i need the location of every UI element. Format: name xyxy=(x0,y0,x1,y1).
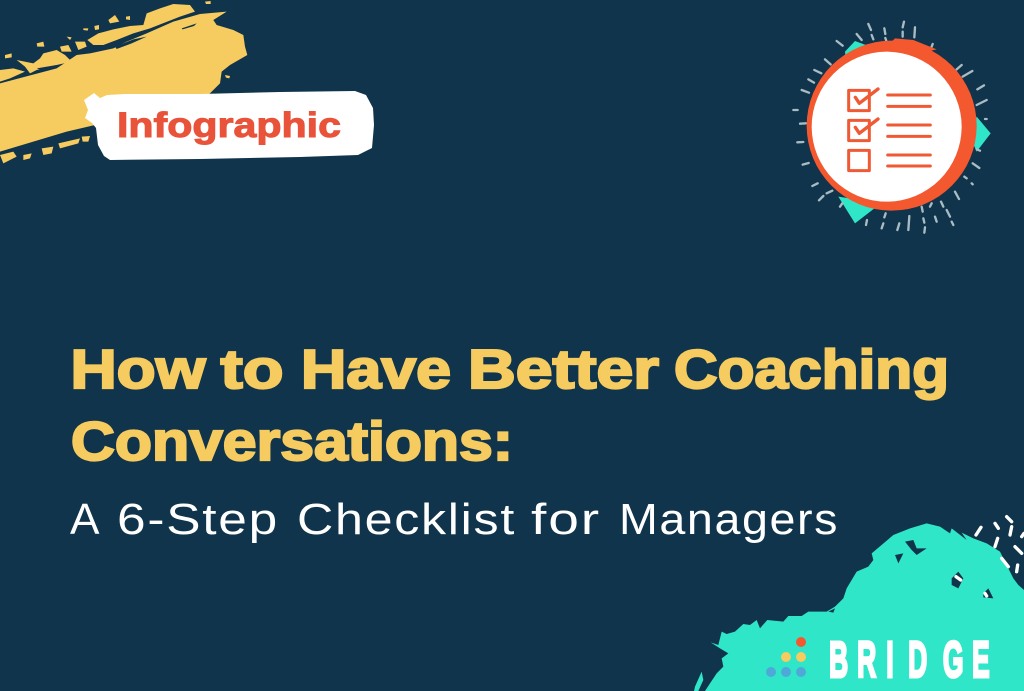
subtitle: for xyxy=(531,495,601,544)
checklist badge xyxy=(793,22,991,233)
title xyxy=(70,338,949,472)
white disc xyxy=(812,52,962,202)
orange ring xyxy=(807,38,977,211)
logo dots xyxy=(766,637,806,677)
white speckles xyxy=(956,517,1024,596)
Bridge logo xyxy=(766,631,990,688)
white brush label xyxy=(84,91,374,160)
subtitle xyxy=(70,495,839,544)
brush gaps xyxy=(828,540,993,613)
title: to xyxy=(220,338,284,400)
logo wordmark: BRIDGE xyxy=(829,631,990,688)
teal blobs behind badge xyxy=(838,41,991,223)
title: How xyxy=(70,338,206,400)
subtitle: Managers xyxy=(619,495,839,544)
yellow brush stroke xyxy=(0,1,247,163)
title: Conversations: xyxy=(71,410,513,472)
checklist icon xyxy=(849,89,930,171)
label text: Infographic: Infographic xyxy=(117,106,341,145)
title: Have xyxy=(301,338,451,400)
title: Better xyxy=(468,338,659,400)
subtitle: 6-Step xyxy=(117,495,279,544)
teal brush corner xyxy=(694,517,1024,691)
subtitle: Checklist xyxy=(297,495,516,544)
title: Coaching xyxy=(674,338,949,400)
subtitle: A xyxy=(70,495,101,544)
radiating rays xyxy=(793,22,987,233)
